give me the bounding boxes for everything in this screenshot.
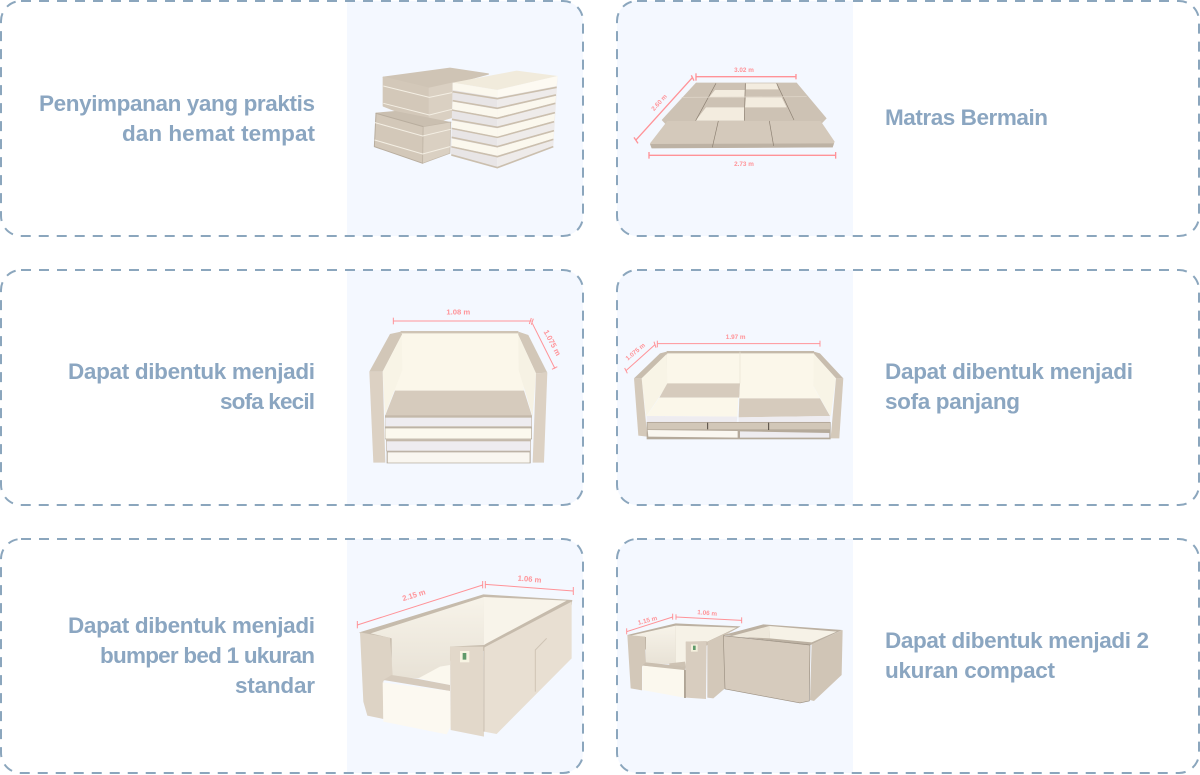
image: stacked mats bbox=[374, 68, 558, 168]
heading: penyimpanan: dan hemat tempat bbox=[122, 121, 316, 146]
heading: bumper bed bbox=[68, 613, 315, 698]
panel: matras bermain bbox=[617, 0, 1199, 237]
heading: penyimpanan bbox=[39, 91, 316, 146]
image: play mat with dimensions: 2.60 m bbox=[650, 93, 669, 113]
heading: matras bermain: Matras Bermain bbox=[885, 105, 1048, 130]
panel: bumper bed bbox=[1, 539, 584, 774]
dimension lines bbox=[627, 614, 742, 634]
heading: sofa panjang bbox=[885, 359, 1133, 414]
panel: sofa kecil bbox=[1, 270, 584, 506]
image: two compact bumper beds with dimensions bbox=[627, 609, 843, 703]
panel: ukuran compact bbox=[617, 539, 1199, 774]
image: standard bumper bed with dimensions: 2.15 m bbox=[401, 587, 427, 603]
image: play mat with dimensions: 3.02 m bbox=[734, 67, 754, 74]
image: standard bumper bed with dimensions: 1.06 m bbox=[517, 574, 542, 585]
image: two compact bumper beds with dimensions: 1.06 m bbox=[697, 609, 718, 618]
heading: sofa kecil bbox=[68, 359, 315, 414]
image: long sofa with dimensions: 1.075 m bbox=[625, 342, 647, 362]
heading: bumper bed: bumper bed 1 ukuran bbox=[100, 643, 315, 668]
image: small sofa with dimensions bbox=[369, 308, 563, 463]
heading: penyimpanan: Penyimpanan yang praktis bbox=[39, 91, 315, 116]
image: two compact bumper beds with dimensions: 1.15 m bbox=[637, 615, 658, 627]
dimension lines bbox=[625, 341, 820, 373]
heading: sofa kecil: sofa kecil bbox=[220, 389, 315, 414]
dimension lines bbox=[393, 318, 557, 369]
image: small sofa with dimensions: 1.075 m bbox=[542, 328, 563, 357]
image: long sofa with dimensions bbox=[625, 334, 843, 439]
icon: logo tag bbox=[691, 644, 698, 652]
panel: penyimpanan bbox=[1, 0, 584, 237]
image: play mat with dimensions: 2.73 m bbox=[734, 161, 754, 168]
image: standard bumper bed with dimensions bbox=[357, 574, 573, 737]
heading: sofa panjang: sofa panjang bbox=[885, 389, 1020, 414]
dimension lines bbox=[357, 581, 573, 628]
image: long sofa with dimensions: 1.97 m bbox=[726, 334, 746, 341]
dimension lines bbox=[634, 73, 836, 159]
image: small sofa with dimensions: 1.08 m bbox=[446, 308, 470, 317]
heading: sofa panjang: Dapat dibentuk menjadi bbox=[885, 359, 1133, 384]
heading: sofa kecil: Dapat dibentuk menjadi bbox=[68, 359, 315, 384]
heading: ukuran compact bbox=[885, 628, 1149, 683]
heading: ukuran compact: ukuran compact bbox=[885, 658, 1056, 683]
image: play mat with dimensions bbox=[634, 67, 836, 168]
heading: bumper bed: standar bbox=[235, 673, 315, 698]
panel: sofa panjang bbox=[617, 270, 1199, 506]
heading: bumper bed: Dapat dibentuk menjadi bbox=[68, 613, 315, 638]
icon: logo tag bbox=[460, 651, 469, 662]
heading: ukuran compact: Dapat dibentuk menjadi 2 bbox=[885, 628, 1149, 653]
